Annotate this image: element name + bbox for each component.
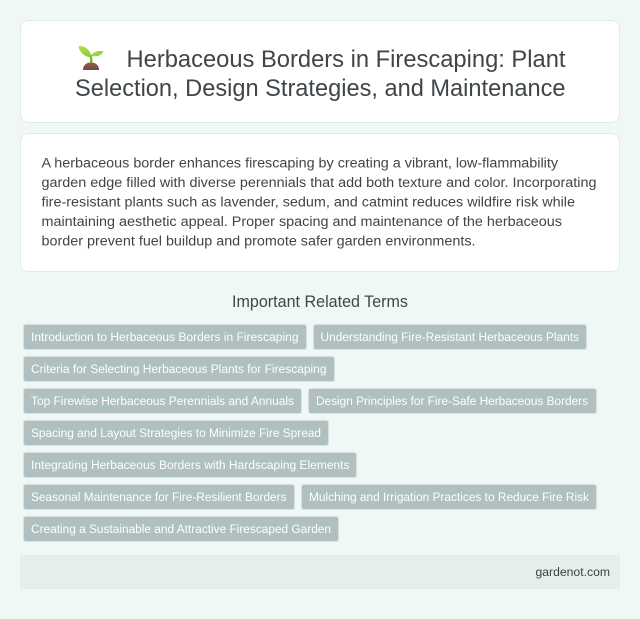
- tag: [24, 356, 334, 382]
- tag: Criteria for Selecting Herbaceous Plants for Firescaping: [31, 362, 327, 376]
- tag: [24, 452, 356, 478]
- tag: Integrating Herbaceous Borders with Hardscaping Elements: [31, 458, 350, 472]
- tag: [24, 484, 294, 510]
- title: Selection, Design Strategies, and Maintenance: [75, 75, 566, 102]
- description text: A herbaceous border enhances firescaping by creating a vibrant, low-flammability: [42, 156, 559, 172]
- tag: [24, 420, 328, 446]
- panel: related term tags: [24, 324, 596, 542]
- tag: Creating a Sustainable and Attractive Firescaped Garden: [31, 522, 331, 536]
- description text: maintaining aesthetic appeal. Proper spacing and maintenance of the herbaceous: [42, 214, 562, 230]
- footer bar: [20, 555, 620, 589]
- tag: Design Principles for Fire-Safe Herbaceous Borders: [316, 394, 588, 408]
- panel: description card: [20, 134, 620, 272]
- title: [75, 46, 566, 102]
- tag: Understanding Fire-Resistant Herbaceous Plants: [320, 330, 579, 344]
- footer source text: gardenot.com: [536, 565, 610, 579]
- title: Herbaceous Borders in Firescaping: Plant: [126, 46, 566, 73]
- icon: sprout: [78, 46, 104, 70]
- tag: [24, 324, 306, 350]
- tag: Seasonal Maintenance for Fire-Resilient Borders: [31, 490, 286, 504]
- tag: [24, 388, 302, 414]
- description text: garden edge filled with diverse perennials that add both texture and color. Incorporating: [42, 175, 596, 191]
- tag: Introduction to Herbaceous Borders in Firescaping: [31, 330, 299, 344]
- heading: important related terms: Important Related Terms: [232, 293, 408, 311]
- tag: [24, 516, 338, 542]
- panel: title card: [20, 20, 620, 122]
- tag: Top Firewise Herbaceous Perennials and Annuals: [31, 394, 294, 408]
- tag: [302, 484, 596, 510]
- tag: [308, 388, 596, 414]
- tag: Mulching and Irrigation Practices to Reduce Fire Risk: [309, 490, 590, 504]
- description text: fire-resistant plants such as lavender, sedum, and catmint reduces wildfire risk while: [42, 194, 575, 210]
- tag: Spacing and Layout Strategies to Minimize Fire Spread: [31, 426, 321, 440]
- tag: [314, 324, 586, 350]
- description text: [42, 156, 596, 250]
- description text: border prevent fuel buildup and promote safer garden environments.: [42, 234, 476, 250]
